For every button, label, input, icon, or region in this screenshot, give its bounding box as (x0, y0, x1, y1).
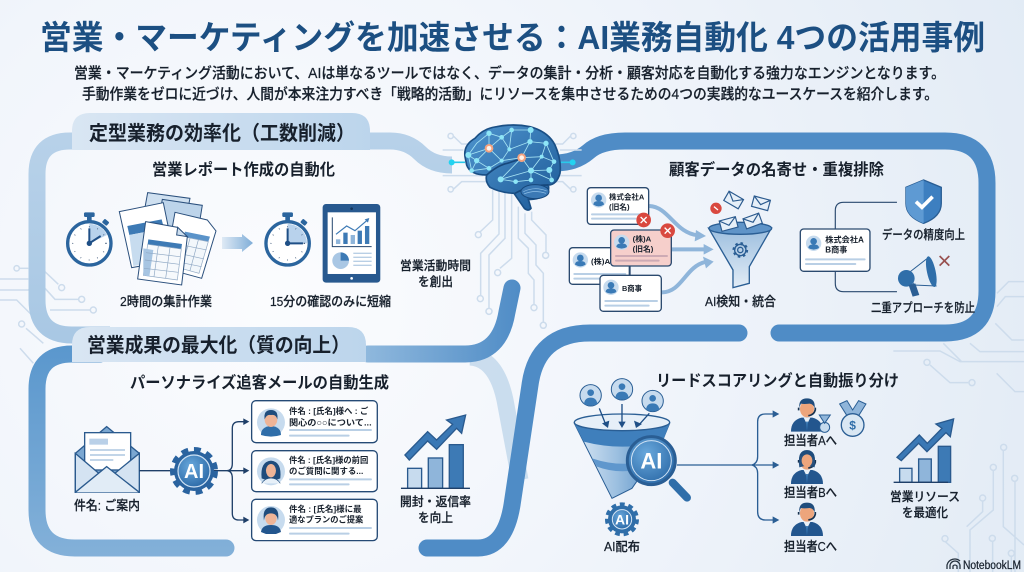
card: abbreviated name (569, 248, 630, 284)
email card 1 (252, 401, 377, 443)
panel: routine work efficiency (37, 113, 471, 335)
email card 1: 件名 : [氏名]様へ : ご (289, 406, 369, 416)
card: highlighted duplicate: (旧名) (633, 243, 654, 253)
outcome text: を創出 (418, 275, 453, 289)
icon: shield (906, 180, 941, 223)
email card 2: のご質問に関する... (289, 466, 363, 476)
icon: funnel with envelopes (709, 191, 772, 288)
card: abbreviated name: (株)A (591, 257, 611, 266)
intro text: 営業・マーケティング活動において、AIは単なるツールではなく、データの集計・分析・顧客対応を自動化する強力なエンジンとなります。 (74, 64, 945, 82)
heading tab (72, 327, 366, 362)
icon: envelope (75, 427, 139, 492)
icon: agent A (791, 398, 830, 432)
connector lines and arrows (139, 418, 249, 523)
card: highlighted duplicate: (株)A (633, 234, 652, 243)
outcome text: 開封・返信率 (400, 494, 471, 509)
outcome text (400, 258, 471, 289)
logo: NotebookLM (947, 559, 1021, 572)
icon: AI gear small (607, 505, 637, 534)
subheading: リードスコアリングと自動振り分け (656, 371, 899, 390)
caption: fifteen minutes: 15分の確認のみに短縮 (270, 294, 391, 309)
email card 3: 件名 : [氏名]様に最 (289, 504, 362, 514)
intro text: 手動作業をゼロに近づけ、人間が本来注力すべき「戦略的活動」にリソースを集中させるための4つの実践的なユースケースを紹介します。 (82, 85, 938, 103)
panel: customer data deduplication (555, 141, 987, 333)
icon: AI gear small: AI (615, 512, 629, 528)
panel: lead scoring (427, 333, 960, 554)
label: agent B: 担当者Bへ (784, 485, 837, 500)
email card 1: 関心の○○について... (289, 418, 372, 428)
icon: rising bar chart (894, 419, 954, 482)
panel: maximize sales results (37, 288, 520, 548)
icon: tablet dashboard (323, 204, 380, 283)
card: unified record with bracket (800, 202, 897, 292)
branching arrows (677, 410, 779, 524)
card: highlighted duplicate (611, 223, 675, 266)
icon: agent C (791, 503, 823, 536)
label: 件名: ご案内 (74, 498, 140, 513)
subheading: 顧客データの名寄せ・重複排除 (669, 160, 884, 179)
card: project B: B商事 (622, 283, 642, 293)
outcome text: を最適化 (902, 505, 948, 520)
icon: funnel with magnifier (574, 404, 687, 498)
label: AI detect: AI検知・統合 (705, 294, 776, 309)
subheading: パーソナライズ追客メールの自動生成 (130, 373, 389, 392)
card: unified record with bracket: 株式会社A (825, 235, 864, 245)
label: data accuracy: データの精度向上 (882, 227, 965, 242)
icon: stopwatch two hours (68, 212, 111, 265)
icon: megaphone crossed (898, 255, 949, 297)
outcome text (890, 489, 960, 520)
intro text (74, 64, 945, 103)
icon: funnel with magnifier: AI (640, 449, 662, 474)
arrows into funnel (649, 206, 714, 292)
outcome text (400, 494, 471, 525)
email card 2 (252, 451, 377, 492)
icon: stacked spreadsheets (119, 193, 216, 285)
circuit decoration: right (893, 343, 1024, 572)
circuit decoration: left (0, 266, 96, 363)
heading tab (72, 113, 370, 150)
icon: AI gear (174, 450, 214, 492)
arrow (222, 234, 253, 252)
title: 営業・マーケティングを加速させる：AI業務自動化 4つの活用事例 (40, 19, 985, 56)
card: project B (600, 275, 661, 311)
icon: agent B (791, 450, 823, 484)
outcome text: 営業リソース (890, 489, 960, 504)
label: agent C: 担当者Cへ (784, 539, 837, 554)
heading tab: 定型業務の効率化（工数削減） (89, 121, 355, 145)
icon: AI gear: AI (184, 461, 204, 483)
caption: two hours: 2時間の集計作業 (120, 294, 212, 309)
circuit decoration: right upper edge (995, 282, 1024, 340)
label: AI distribution: AI配布 (604, 539, 640, 554)
icon: medal: $ (849, 418, 856, 432)
icon: leads (580, 379, 663, 412)
icon: rising bar chart (401, 415, 470, 488)
icon: central AI brain with circuits (443, 125, 582, 328)
email card 3 (252, 499, 377, 541)
label: prevent double approach: 二重アプローチを防止 (871, 300, 975, 315)
card: old company name: 株式会社A (609, 191, 645, 201)
label: agent A: 担当者Aへ (784, 433, 837, 448)
icon: medal (840, 401, 866, 436)
email card 3: 適なプランのご提案 (289, 515, 364, 525)
heading tab: 営業成果の最大化（質の向上） (87, 333, 350, 357)
outcome text: を向上 (418, 510, 453, 525)
card: old company name: (旧名) (609, 201, 630, 211)
email card 2: 件名 : [氏名]様の前回 (289, 455, 368, 465)
outcome text: 営業活動時間 (400, 258, 471, 273)
icon: stopwatch fifteen minutes (266, 212, 309, 265)
card: old company name (587, 188, 651, 227)
subheading: 営業レポート作成の自動化 (152, 160, 335, 179)
card: unified record with bracket: B商事 (825, 245, 847, 255)
